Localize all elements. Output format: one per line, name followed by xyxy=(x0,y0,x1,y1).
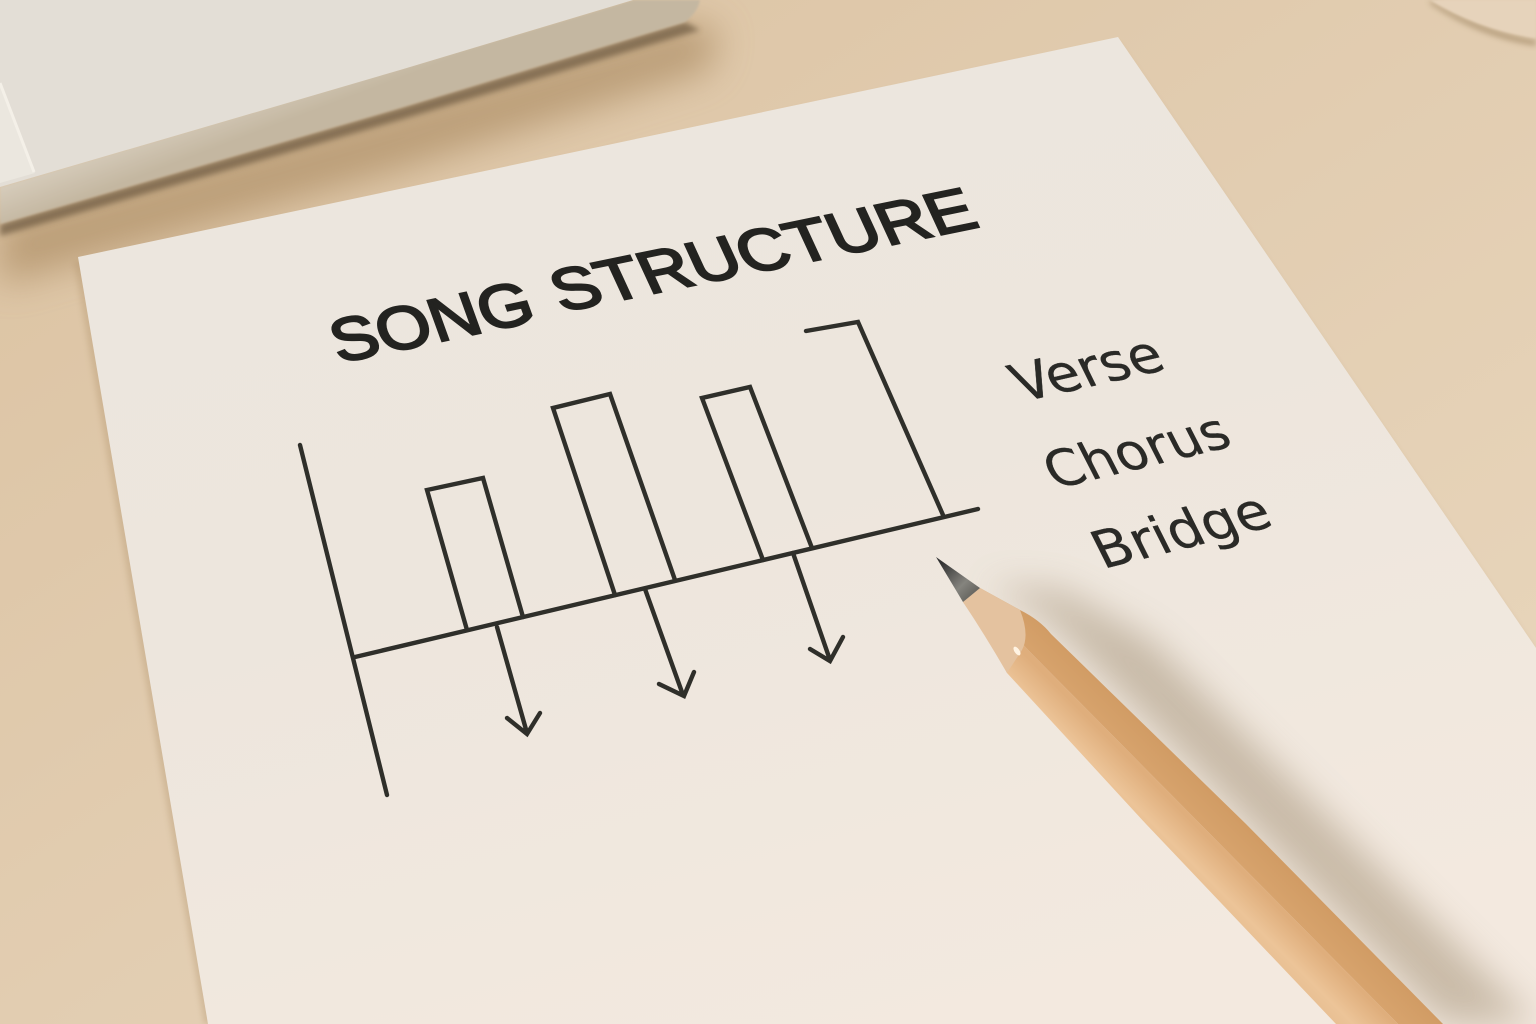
bar 3 xyxy=(702,387,812,560)
pencil highlight xyxy=(1012,645,1022,657)
bar chart xyxy=(300,322,978,795)
vertical axis xyxy=(300,445,387,795)
bar 2 xyxy=(553,394,675,595)
notebook side xyxy=(0,0,700,224)
pencil lead xyxy=(936,557,980,602)
title xyxy=(320,176,987,376)
notebook cover xyxy=(0,0,633,187)
notebook xyxy=(0,0,700,224)
arrow 2 xyxy=(645,589,694,696)
horizontal axis xyxy=(355,509,978,657)
bar 1 xyxy=(427,478,523,630)
pencil xyxy=(936,557,1443,1024)
notebook spine strip xyxy=(0,83,35,183)
notebook shadow xyxy=(0,22,720,285)
bar 4 xyxy=(806,322,943,515)
label: Bridge: Bridge xyxy=(1081,481,1281,581)
title: SONG xyxy=(320,269,543,376)
labels xyxy=(1000,324,1281,581)
pencil right facet xyxy=(963,588,1443,1024)
label: Verse: Verse xyxy=(1000,324,1174,414)
label: Chorus: Chorus xyxy=(1032,401,1241,501)
sharpened wood cone xyxy=(963,588,1026,673)
title: STRUCTURE xyxy=(539,176,987,325)
pencil left facet xyxy=(963,602,1398,1024)
arrow 3 xyxy=(793,553,843,661)
arrow 1 xyxy=(497,627,540,734)
cup at top right xyxy=(1430,0,1536,46)
pencil shadow xyxy=(985,585,1536,1024)
